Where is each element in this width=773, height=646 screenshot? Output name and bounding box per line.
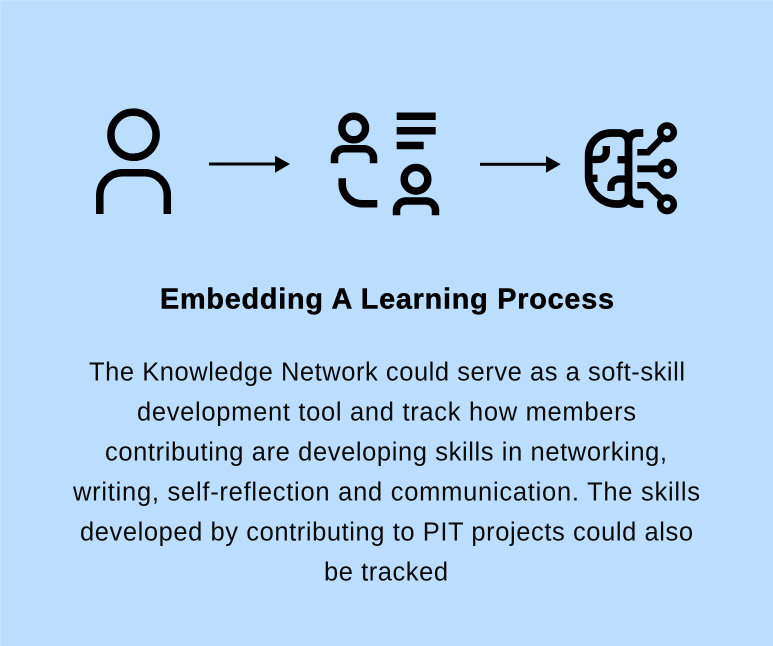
icon: two people exchanging documents <box>334 116 436 215</box>
body text: be tracked <box>324 558 448 586</box>
body text: developed by contributing to PIT projects could also <box>80 518 693 546</box>
body text: The Knowledge Network could serve as a soft-skill <box>89 359 685 387</box>
body text: development tool and track how members <box>137 399 636 427</box>
body text <box>72 359 700 586</box>
arrow: person to group <box>209 156 290 173</box>
icon: brain with network nodes <box>589 126 674 211</box>
body text: writing, self-reflection and communication. The skills <box>72 479 700 507</box>
title: Embedding A Learning Process <box>160 283 614 315</box>
icon: person <box>100 112 167 214</box>
body text: contributing are developing skills in networking, <box>105 439 667 467</box>
arrow: group to brain <box>480 156 561 173</box>
